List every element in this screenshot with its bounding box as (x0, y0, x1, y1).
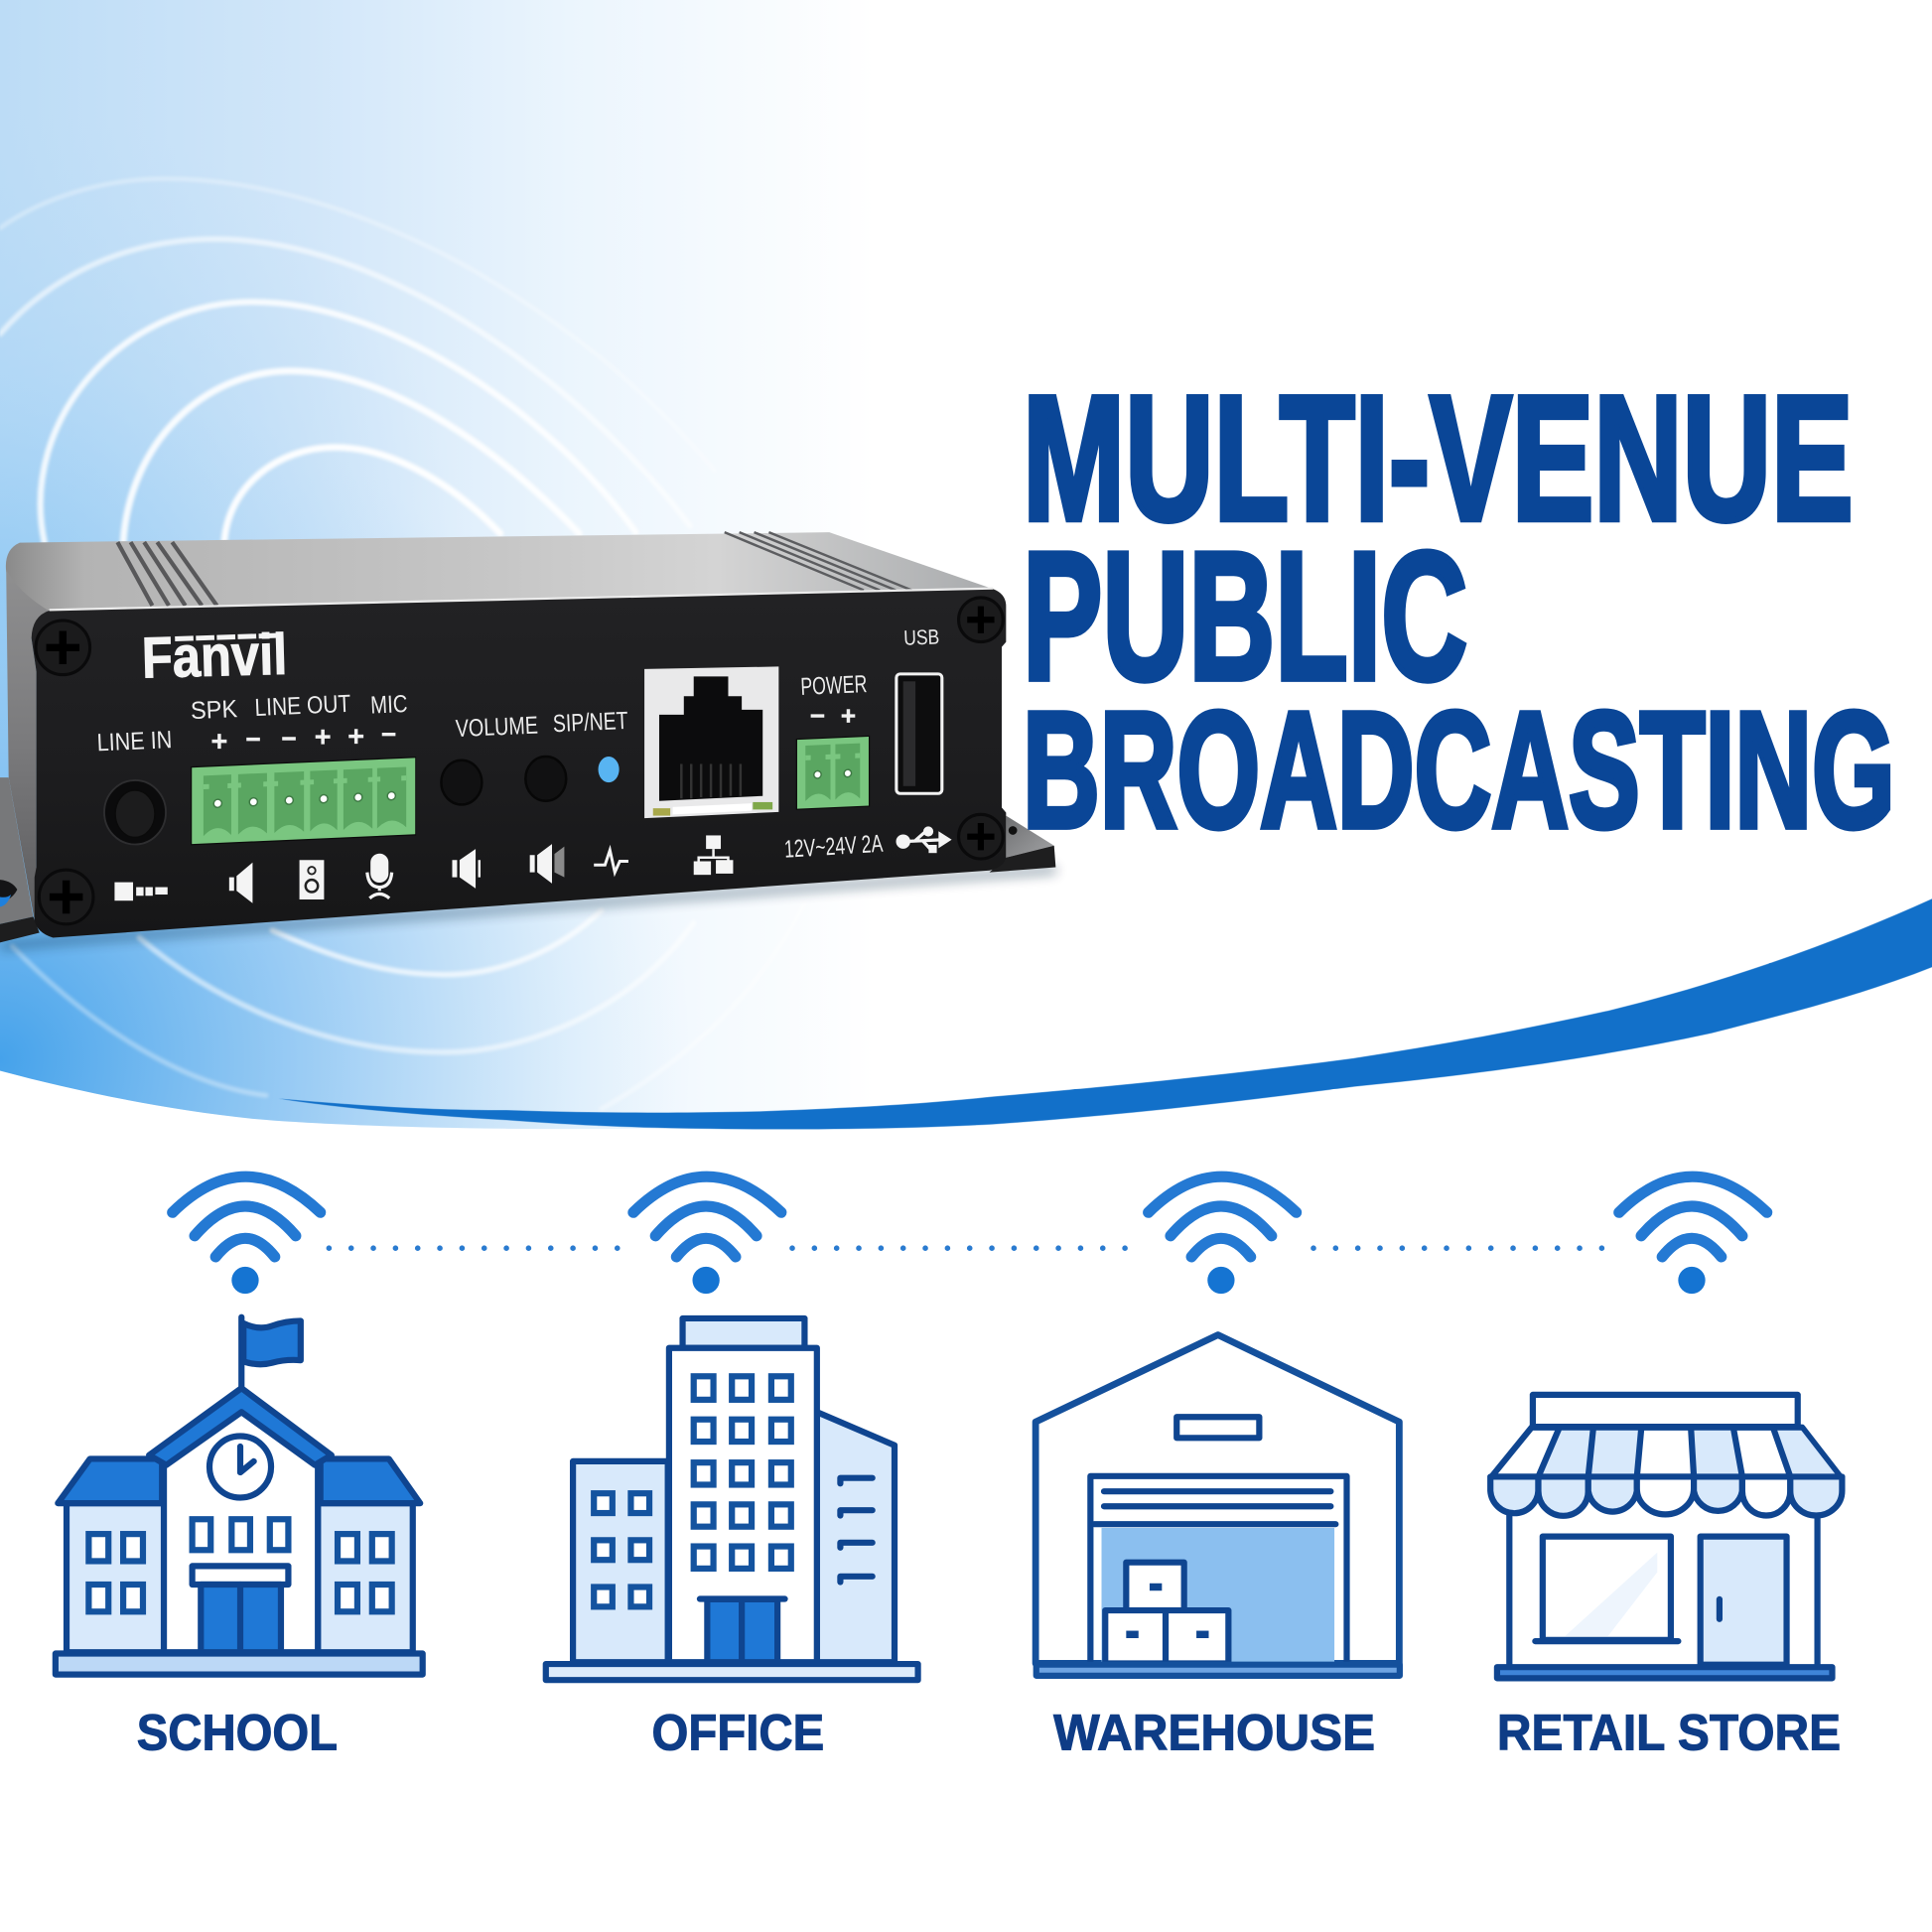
icon: volume speaker (452, 849, 481, 889)
tower (669, 1348, 817, 1662)
warehouse base (1036, 1665, 1400, 1676)
clock (209, 1436, 271, 1498)
wifi: school (173, 1176, 321, 1294)
label: office: OFFICE (652, 1704, 824, 1760)
front panel (32, 589, 1006, 937)
icon: usb symbol (897, 828, 949, 852)
icon: warehouse (1035, 1335, 1400, 1676)
panel top highlight (50, 589, 993, 610)
six pin green connector (191, 757, 416, 845)
warehouse sign (1176, 1417, 1259, 1438)
office base (546, 1664, 918, 1680)
vent lines left (117, 542, 216, 606)
icon: office (546, 1318, 918, 1680)
right slats (840, 1478, 873, 1583)
panel labels (96, 625, 940, 864)
pediment (149, 1388, 332, 1465)
ethernet port (644, 666, 778, 818)
icon: network (694, 835, 733, 875)
icon: line in jack (114, 883, 168, 900)
top case (6, 532, 993, 628)
usb port (897, 674, 942, 793)
store window (1535, 1537, 1678, 1641)
flag (241, 1317, 301, 1390)
background gradient (0, 0, 753, 1130)
right block (817, 1412, 895, 1662)
store walls (1509, 1511, 1818, 1665)
left wing (67, 1503, 164, 1652)
dotted connectors (329, 1246, 1606, 1250)
icon: microphone (367, 855, 392, 898)
left windows (594, 1493, 649, 1606)
wifi: warehouse (1149, 1176, 1297, 1294)
panel labels: 12V~24V 2A (783, 831, 884, 864)
connector pins (213, 791, 395, 808)
door bar (1094, 1522, 1335, 1527)
store sign (1533, 1395, 1798, 1427)
label: school: SCHOOL (137, 1704, 338, 1760)
interior (1102, 1528, 1334, 1663)
icon: speaker box (300, 860, 324, 899)
panel labels: POWER (800, 671, 868, 701)
title: PUBLIC (1023, 514, 1467, 718)
screws (36, 598, 1003, 924)
panel labels: SPK (190, 696, 238, 725)
right flange (990, 816, 1055, 873)
panel labels: MIC (370, 691, 408, 720)
label: retail store: RETAIL STORE (1497, 1704, 1841, 1760)
icon: speaker (229, 863, 252, 903)
sound wave rings (0, 177, 661, 1110)
awning stripes (1538, 1431, 1836, 1475)
roof box (683, 1318, 804, 1348)
store door (1701, 1537, 1787, 1665)
device shadow (0, 870, 1056, 946)
warehouse shell (1035, 1335, 1399, 1663)
office door (700, 1599, 785, 1662)
title (1023, 358, 1895, 863)
panel labels: LINE IN (96, 727, 173, 757)
store base (1497, 1667, 1832, 1678)
awning ribs (1538, 1430, 1790, 1476)
panel labels: USB (903, 625, 940, 650)
device: audio gateway (0, 532, 1056, 946)
wifi: retail (1619, 1176, 1767, 1294)
icon: pulse (594, 850, 628, 873)
status led (599, 757, 620, 782)
center wall (164, 1412, 318, 1652)
scallops (1490, 1476, 1842, 1516)
volume button (441, 760, 482, 804)
polarity marks (211, 709, 855, 749)
line in jack (104, 780, 166, 845)
school door (193, 1566, 288, 1652)
icon: retail store (1490, 1395, 1842, 1678)
wifi: office (633, 1176, 781, 1294)
panel labels: SIP/NET (552, 708, 628, 738)
awning top (1491, 1428, 1841, 1476)
icon: volume speaker two (530, 844, 552, 884)
tower windows (694, 1376, 791, 1569)
vent lines right (725, 532, 911, 590)
blue swoosh (278, 898, 1932, 1129)
boxes (1105, 1563, 1228, 1663)
school base (56, 1654, 423, 1675)
connector ticks (204, 775, 406, 789)
door frame (1090, 1476, 1346, 1663)
door slats (1104, 1491, 1330, 1506)
icon: school (56, 1317, 423, 1675)
sip button (525, 757, 566, 801)
connector pockets (204, 766, 406, 836)
right wing (318, 1503, 413, 1652)
left block (573, 1461, 668, 1662)
right roof (321, 1458, 420, 1503)
left flange (0, 777, 40, 942)
left roof (58, 1458, 162, 1503)
panel labels: VOLUME (455, 713, 539, 743)
label: warehouse: WAREHOUSE (1053, 1704, 1375, 1760)
Fanvil logo: Fanvil (141, 622, 288, 691)
power connector (796, 736, 870, 810)
left side wall (6, 569, 50, 920)
school windows (88, 1519, 392, 1611)
panel labels: LINE OUT (254, 691, 351, 722)
